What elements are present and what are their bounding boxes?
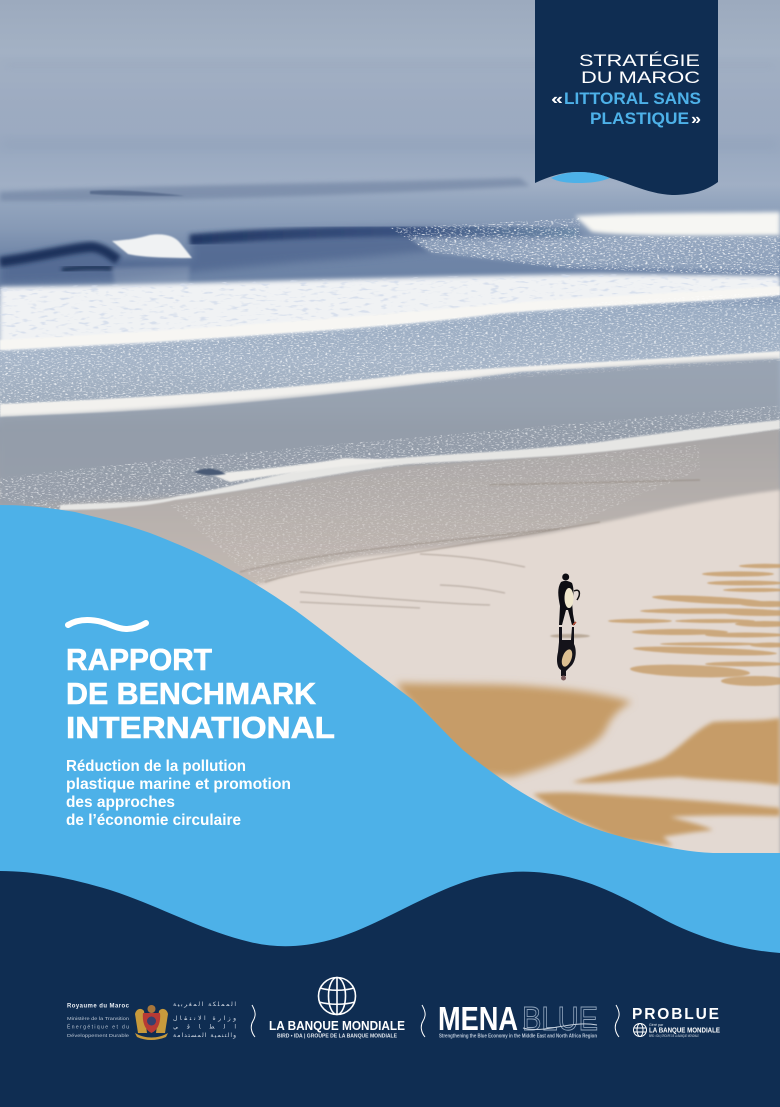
white crest bbox=[112, 234, 192, 258]
grey-blue shallows bbox=[0, 358, 780, 505]
logo: PROBLUE bbox=[632, 1006, 720, 1038]
Arabic ministry text: المملكة المغربية bbox=[173, 1001, 236, 1008]
title bbox=[66, 643, 335, 745]
subtitle: des approches bbox=[66, 794, 175, 811]
French ministry text bbox=[67, 1004, 130, 1038]
wave body bbox=[0, 228, 580, 284]
logo: MENA Blue: MENA bbox=[438, 1000, 518, 1037]
logo: PROBLUE: LA BANQUE MONDIALE bbox=[649, 1026, 720, 1034]
surfer bbox=[558, 574, 579, 625]
subtitle: plastique marine et promotion bbox=[66, 776, 291, 793]
banner text: « bbox=[551, 91, 563, 108]
Arabic ministry text: وزارة الانتقال bbox=[173, 1015, 236, 1022]
logo: MENA Blue: Strengthening the Blue Economy in the Middle East and North Africa Region bbox=[439, 1034, 597, 1040]
banner: strategy title bbox=[535, 0, 718, 195]
wet sand bbox=[60, 428, 780, 600]
subtitle: Réduction de la pollution bbox=[66, 758, 246, 775]
surfer and reflection bbox=[550, 574, 590, 680]
banner wave accent bbox=[551, 172, 610, 183]
banner text: STRATÉGIE bbox=[579, 51, 700, 70]
French ministry text: Développement Durable bbox=[67, 1033, 130, 1038]
breaking wave bbox=[0, 212, 780, 288]
decorative wave mark bbox=[68, 620, 146, 629]
logo: PROBLUE: PROBLUE bbox=[632, 1006, 719, 1023]
logo: La Banque Mondiale bbox=[269, 978, 405, 1040]
Arabic ministry text: الطاقي bbox=[173, 1024, 236, 1030]
banner text: » bbox=[691, 111, 701, 128]
reflection bbox=[550, 627, 590, 680]
icon: small globe bbox=[634, 1024, 646, 1036]
logo: MENA Blue bbox=[438, 1000, 598, 1040]
sea and sky background bbox=[0, 0, 780, 860]
logo: PROBLUE: BIRD • IDA | GROUPE DE LA BANQUE MONDIALE bbox=[649, 1034, 700, 1038]
banner text: LITTORAL SANS bbox=[564, 90, 701, 108]
subtitle: de l’économie circulaire bbox=[66, 812, 241, 829]
tan sand patches bbox=[397, 564, 780, 846]
icon: globe bbox=[318, 978, 356, 1014]
icon: royal emblem bbox=[135, 1005, 168, 1040]
logo: Royaume du Maroc bbox=[67, 1001, 236, 1040]
panel: blue wave bbox=[0, 505, 780, 960]
dry sand bbox=[220, 490, 780, 860]
French ministry text: Énergétique et du bbox=[67, 1024, 129, 1030]
photo: surfer on beach bbox=[0, 0, 780, 860]
panel: navy footer bbox=[0, 871, 780, 1107]
divider squiggle bbox=[421, 1005, 425, 1037]
Arabic ministry text bbox=[173, 1001, 236, 1039]
logo: MENA Blue: BLUE bbox=[522, 1000, 598, 1037]
French ministry text: Ministère de la Transition bbox=[67, 1016, 130, 1021]
banner text: PLASTIQUE bbox=[590, 110, 689, 128]
divider squiggle bbox=[251, 1005, 255, 1037]
distant swell bands bbox=[0, 62, 780, 201]
logo: La Banque Mondiale: BIRD • IDA | GROUPE DE LA BANQUE MONDIALE bbox=[277, 1034, 397, 1040]
foam section bbox=[575, 212, 780, 237]
divider squiggle bbox=[615, 1005, 619, 1037]
sparkling water bbox=[0, 292, 780, 417]
French ministry text: Royaume du Maroc bbox=[67, 1004, 130, 1010]
banner text bbox=[551, 51, 701, 128]
subtitle bbox=[66, 758, 291, 829]
logo: La Banque Mondiale: LA BANQUE MONDIALE bbox=[269, 1019, 405, 1033]
third foam line bbox=[60, 420, 780, 510]
large foam band bbox=[0, 270, 780, 355]
logo: PROBLUE: Géré par bbox=[649, 1023, 664, 1027]
tide ripples bbox=[240, 480, 700, 608]
second foam line bbox=[0, 351, 780, 417]
title: DE BENCHMARK bbox=[66, 677, 316, 711]
title: INTERNATIONAL bbox=[66, 711, 335, 745]
banner shape bbox=[535, 0, 718, 195]
upper right ripples bbox=[608, 564, 780, 686]
Arabic ministry text: والتنمية المستدامة bbox=[173, 1032, 236, 1039]
title: RAPPORT bbox=[66, 643, 212, 677]
banner text: DU MAROC bbox=[581, 69, 700, 87]
